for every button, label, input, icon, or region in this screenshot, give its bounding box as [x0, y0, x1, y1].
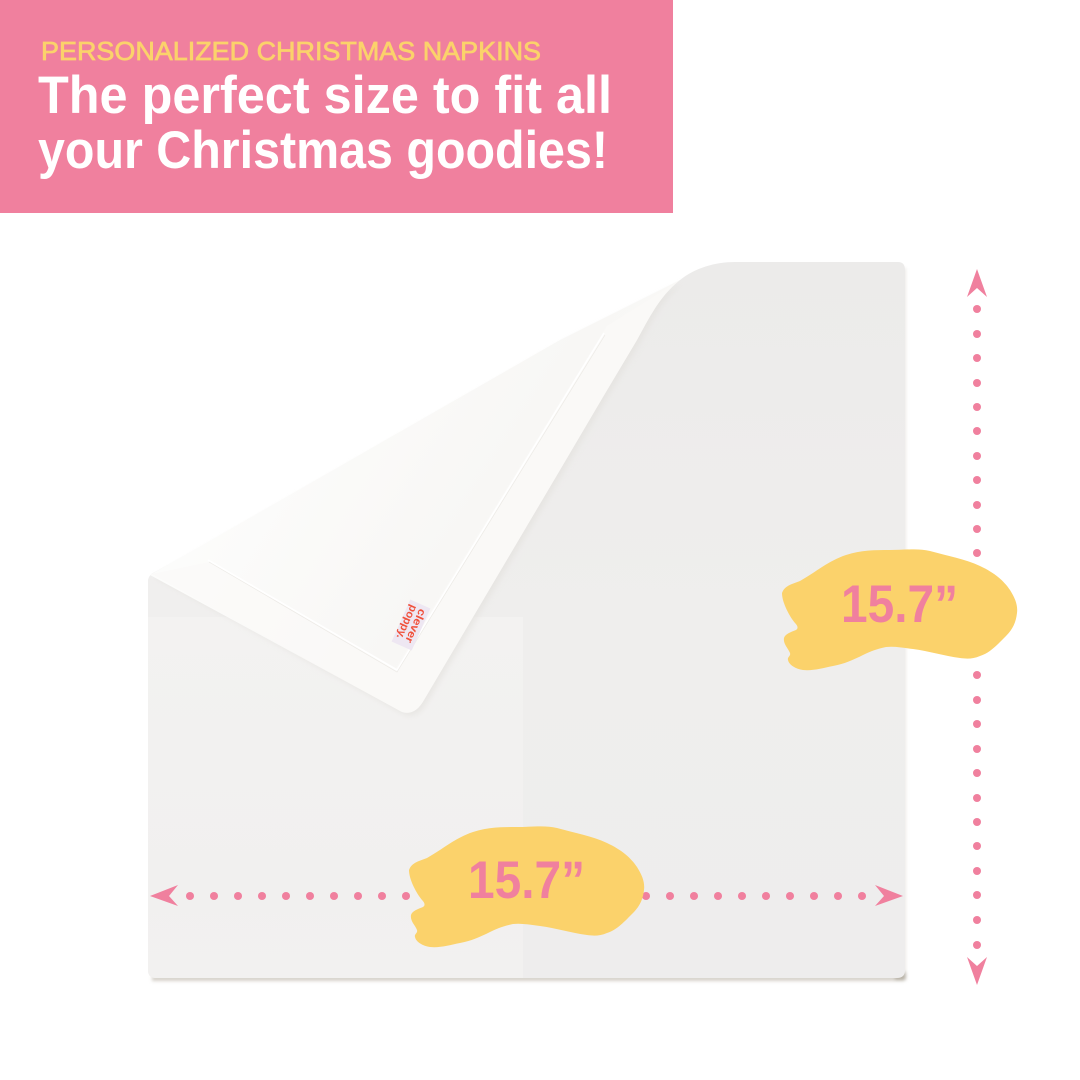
upper left napkin corner shading	[148, 572, 440, 710]
main title	[38, 66, 612, 180]
width value: 15.7”	[468, 851, 585, 910]
bottom arrowhead	[967, 957, 987, 985]
clever poppy label: clever	[402, 607, 428, 645]
vertical dimension arrow	[967, 269, 987, 985]
folded corner flap	[150, 280, 683, 716]
clever poppy label	[391, 599, 430, 650]
napkin illustration	[148, 262, 906, 981]
eyebrow heading: PERSONALIZED CHRISTMAS NAPKINS	[41, 36, 541, 66]
main title: The perfect size to fit all	[38, 66, 612, 125]
height value: 15.7”	[841, 575, 958, 634]
width callout	[409, 826, 644, 947]
main title: your Christmas goodies!	[38, 121, 608, 180]
napkin shadows	[152, 268, 906, 981]
right arrowhead	[875, 885, 903, 906]
height callout	[782, 549, 1017, 670]
flap stitching	[208, 333, 604, 670]
flap hem band	[152, 280, 680, 713]
napkin body	[148, 262, 905, 978]
top arrowhead	[967, 269, 987, 297]
header banner	[0, 0, 673, 213]
left lighter panel below the fold	[148, 617, 523, 978]
clever poppy label: poppy.	[394, 603, 419, 641]
left arrowhead	[150, 885, 178, 906]
horizontal dimension arrow	[150, 885, 903, 906]
